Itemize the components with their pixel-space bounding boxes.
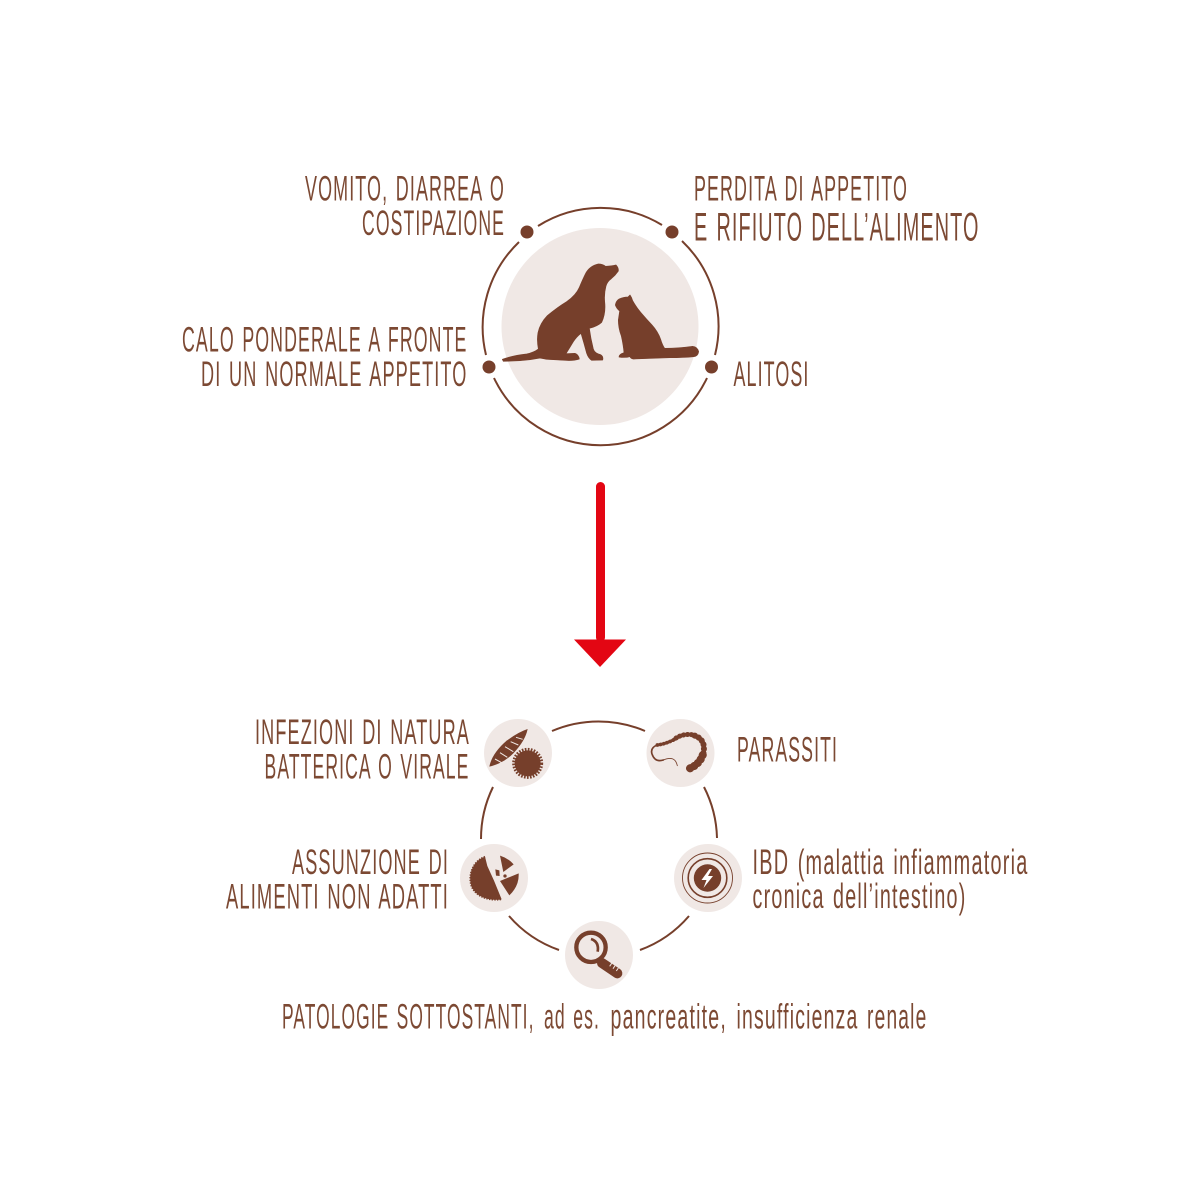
ring marker dots xyxy=(482,226,718,374)
background disc xyxy=(502,228,698,425)
label: loss of appetite: PERDITA DI APPETITO xyxy=(694,168,908,208)
panel: causes: BATTERICA O VIRALE xyxy=(264,746,470,786)
label: underlying conditions: pancreatite, xyxy=(610,996,727,1036)
label: normal appetite: DI UN NORMALE APPETITO xyxy=(201,354,468,394)
label: vomiting: VOMITO, DIARREA O xyxy=(305,168,505,208)
label: food intake line one: ASSUNZIONE DI xyxy=(292,842,449,882)
icon: broken food pieces xyxy=(460,844,528,912)
label: underlying conditions: ad es. xyxy=(544,996,600,1036)
label: food intake line two: ALIMENTI NON ADATTI xyxy=(226,876,449,916)
arrow: symptoms to causes xyxy=(574,482,626,667)
icon: parasite worm xyxy=(646,719,714,787)
label: weight loss: CALO PONDERALE A FRONTE xyxy=(182,320,468,360)
panel: symptoms: COSTIPAZIONE xyxy=(362,203,505,243)
ring segments xyxy=(481,721,717,950)
label: underlying conditions: insufficienza xyxy=(736,996,858,1036)
label: infections line one: INFEZIONI DI NATURA xyxy=(255,712,470,752)
panel: symptoms xyxy=(182,168,980,445)
icon: bacteria and virus xyxy=(484,719,552,787)
label: underlying conditions: renale xyxy=(867,996,928,1036)
panel: causes: PARASSITI xyxy=(737,730,838,770)
icon: magnifying glass xyxy=(565,921,633,989)
icon: dog and cat silhouette xyxy=(502,264,699,361)
icon: inflammation target with bolt xyxy=(674,844,742,912)
ring segments xyxy=(483,208,719,445)
label: IBD line two: cronica dell’intestino) xyxy=(752,876,966,916)
panel: causes xyxy=(226,712,1028,1036)
label: halitosis: ALITOSI xyxy=(734,354,810,394)
label: underlying conditions: PATOLOGIE SOTTOSTANTI, xyxy=(282,996,534,1036)
